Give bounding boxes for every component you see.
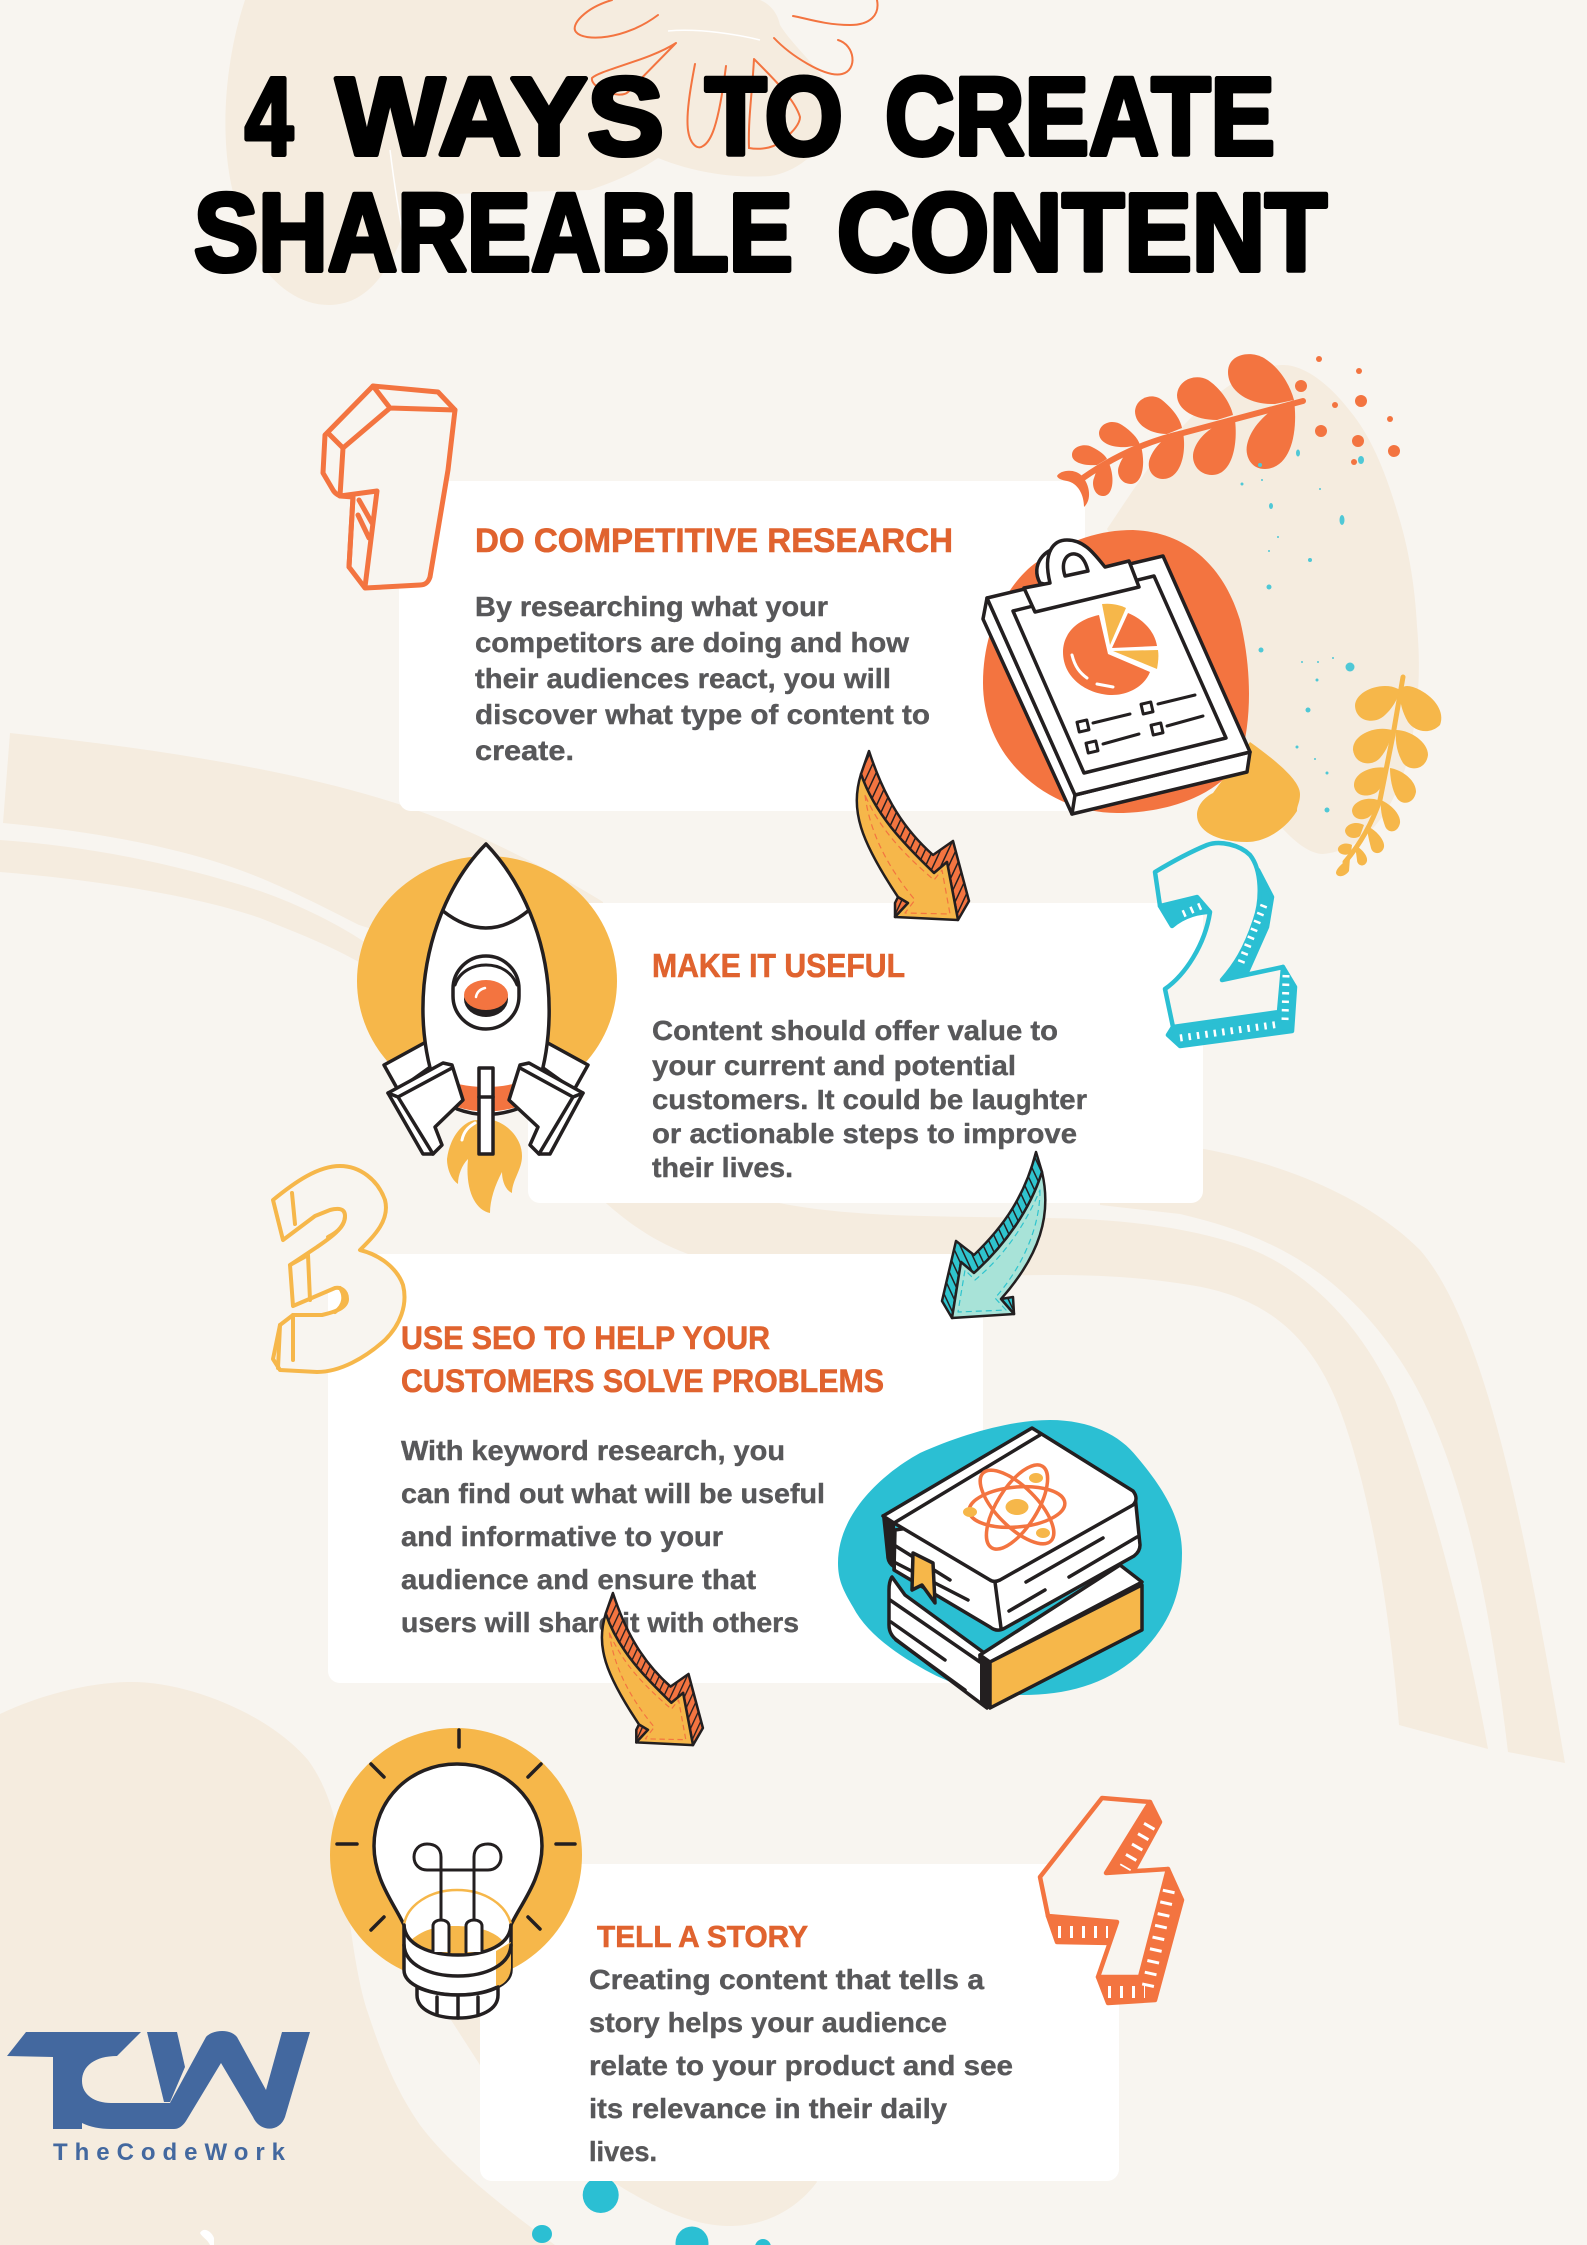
- number 2: [1155, 843, 1295, 1046]
- panel: step 1: [399, 481, 1085, 811]
- body text 3: and informative to your: [401, 1521, 723, 1552]
- filament: [414, 1844, 501, 1952]
- body text 4: lives.: [589, 2136, 657, 2167]
- icon: books: [838, 1420, 1182, 1708]
- body text 4: [589, 1964, 1013, 2167]
- orange blob: [983, 530, 1249, 813]
- body text 4: story helps your audience: [589, 2007, 947, 2038]
- flame: [447, 1120, 522, 1213]
- title: [194, 56, 1327, 294]
- title: CREATE: [885, 56, 1275, 178]
- checklist: [1077, 695, 1203, 753]
- back fins: [384, 1042, 588, 1090]
- body text 3: can find out what will be useful: [401, 1478, 825, 1509]
- body text 3: users will share it with others: [401, 1607, 799, 1638]
- title: SHAREABLE: [194, 172, 793, 294]
- card 4: [480, 1864, 1119, 2181]
- body text 1: By researching what your: [475, 591, 828, 622]
- panel: step 4: [480, 1864, 1119, 2181]
- socket yellow parts: [411, 1926, 502, 1955]
- body text 1: competitors are doing and how: [475, 627, 909, 658]
- clipboard board: [983, 540, 1250, 814]
- arrow: orange 1: [857, 751, 969, 920]
- number 1: [323, 386, 455, 588]
- body text 2: customers. It could be laughter: [652, 1084, 1087, 1115]
- logo wordmark: TheCodeWork: [53, 2139, 286, 2166]
- body text 2: [652, 1015, 1087, 1183]
- rays: [337, 1730, 575, 1930]
- heading 3: CUSTOMERS SOLVE PROBLEMS: [401, 1363, 884, 1399]
- orange band: [457, 1084, 517, 1112]
- orange circle: [357, 856, 617, 1106]
- body text 3: [401, 1435, 825, 1638]
- title: WAYS: [336, 56, 664, 178]
- card 3: [328, 1254, 983, 1683]
- small white blob: [200, 2230, 214, 2245]
- body text 4: Creating content that tells a: [589, 1964, 984, 1995]
- teal blob: [838, 1420, 1182, 1695]
- title: 4: [245, 56, 293, 178]
- body text 3: With keyword research, you: [401, 1435, 785, 1466]
- lower book: [889, 1565, 1142, 1708]
- panel: step 2: [528, 903, 1203, 1203]
- decorative teal dots: [532, 2177, 771, 2245]
- body text 4: relate to your product and see: [589, 2050, 1013, 2081]
- rocket body: [423, 844, 549, 1114]
- yellow blob: [1197, 742, 1300, 842]
- body text 1: create.: [475, 735, 574, 766]
- yellow plant: [1336, 677, 1441, 876]
- orange plant: [1057, 354, 1400, 507]
- teal specks: [1240, 450, 1364, 812]
- center bar: [479, 1068, 493, 1154]
- upper book: [883, 1428, 1140, 1630]
- front fins: [388, 1063, 583, 1154]
- body text 2: their lives.: [652, 1152, 793, 1183]
- body text 1: discover what type of content to: [475, 699, 930, 730]
- icon: clipboard with pie chart: [983, 530, 1300, 842]
- title: CONTENT: [837, 172, 1327, 294]
- icon: light bulb: [330, 1728, 582, 2018]
- collar and cap: [404, 1925, 511, 2018]
- flower outline: [575, 0, 878, 149]
- orange circle: [330, 1728, 582, 1982]
- decorative light curves: [390, 30, 760, 245]
- body text 1: [475, 591, 930, 766]
- heading 3: USE SEO TO HELP YOUR: [401, 1320, 770, 1356]
- panel: step 3: [328, 1254, 983, 1683]
- arrow: orange 2: [602, 1593, 703, 1745]
- logo mark: [7, 2031, 310, 2129]
- atom: [967, 1456, 1067, 1558]
- body text 2: your current and potential: [652, 1050, 1016, 1081]
- nose line: [443, 911, 528, 928]
- pie chart: [1063, 615, 1150, 695]
- arrow: teal: [942, 1152, 1045, 1318]
- card 2: [528, 903, 1203, 1203]
- heading 4: TELL A STORY: [597, 1919, 808, 1954]
- window: [453, 956, 519, 1029]
- title: TO: [705, 56, 843, 178]
- heading 3: [401, 1320, 884, 1399]
- heading 2: MAKE IT USEFUL: [652, 947, 905, 984]
- body text 2: or actionable steps to improve: [652, 1118, 1077, 1149]
- number 4: [1040, 1798, 1182, 2003]
- number 3: [273, 1166, 404, 1372]
- icon: rocket: [357, 844, 617, 1213]
- body text 3: audience and ensure that: [401, 1564, 756, 1595]
- bulb glass: [374, 1764, 542, 1995]
- body text 4: its relevance in their daily: [589, 2093, 947, 2124]
- card 1: [399, 481, 1085, 811]
- heading 1: DO COMPETITIVE RESEARCH: [475, 522, 953, 560]
- body text 2: Content should offer value to: [652, 1015, 1058, 1046]
- logo: TheCodeWork: [7, 2031, 310, 2166]
- body text 1: their audiences react, you will: [475, 663, 891, 694]
